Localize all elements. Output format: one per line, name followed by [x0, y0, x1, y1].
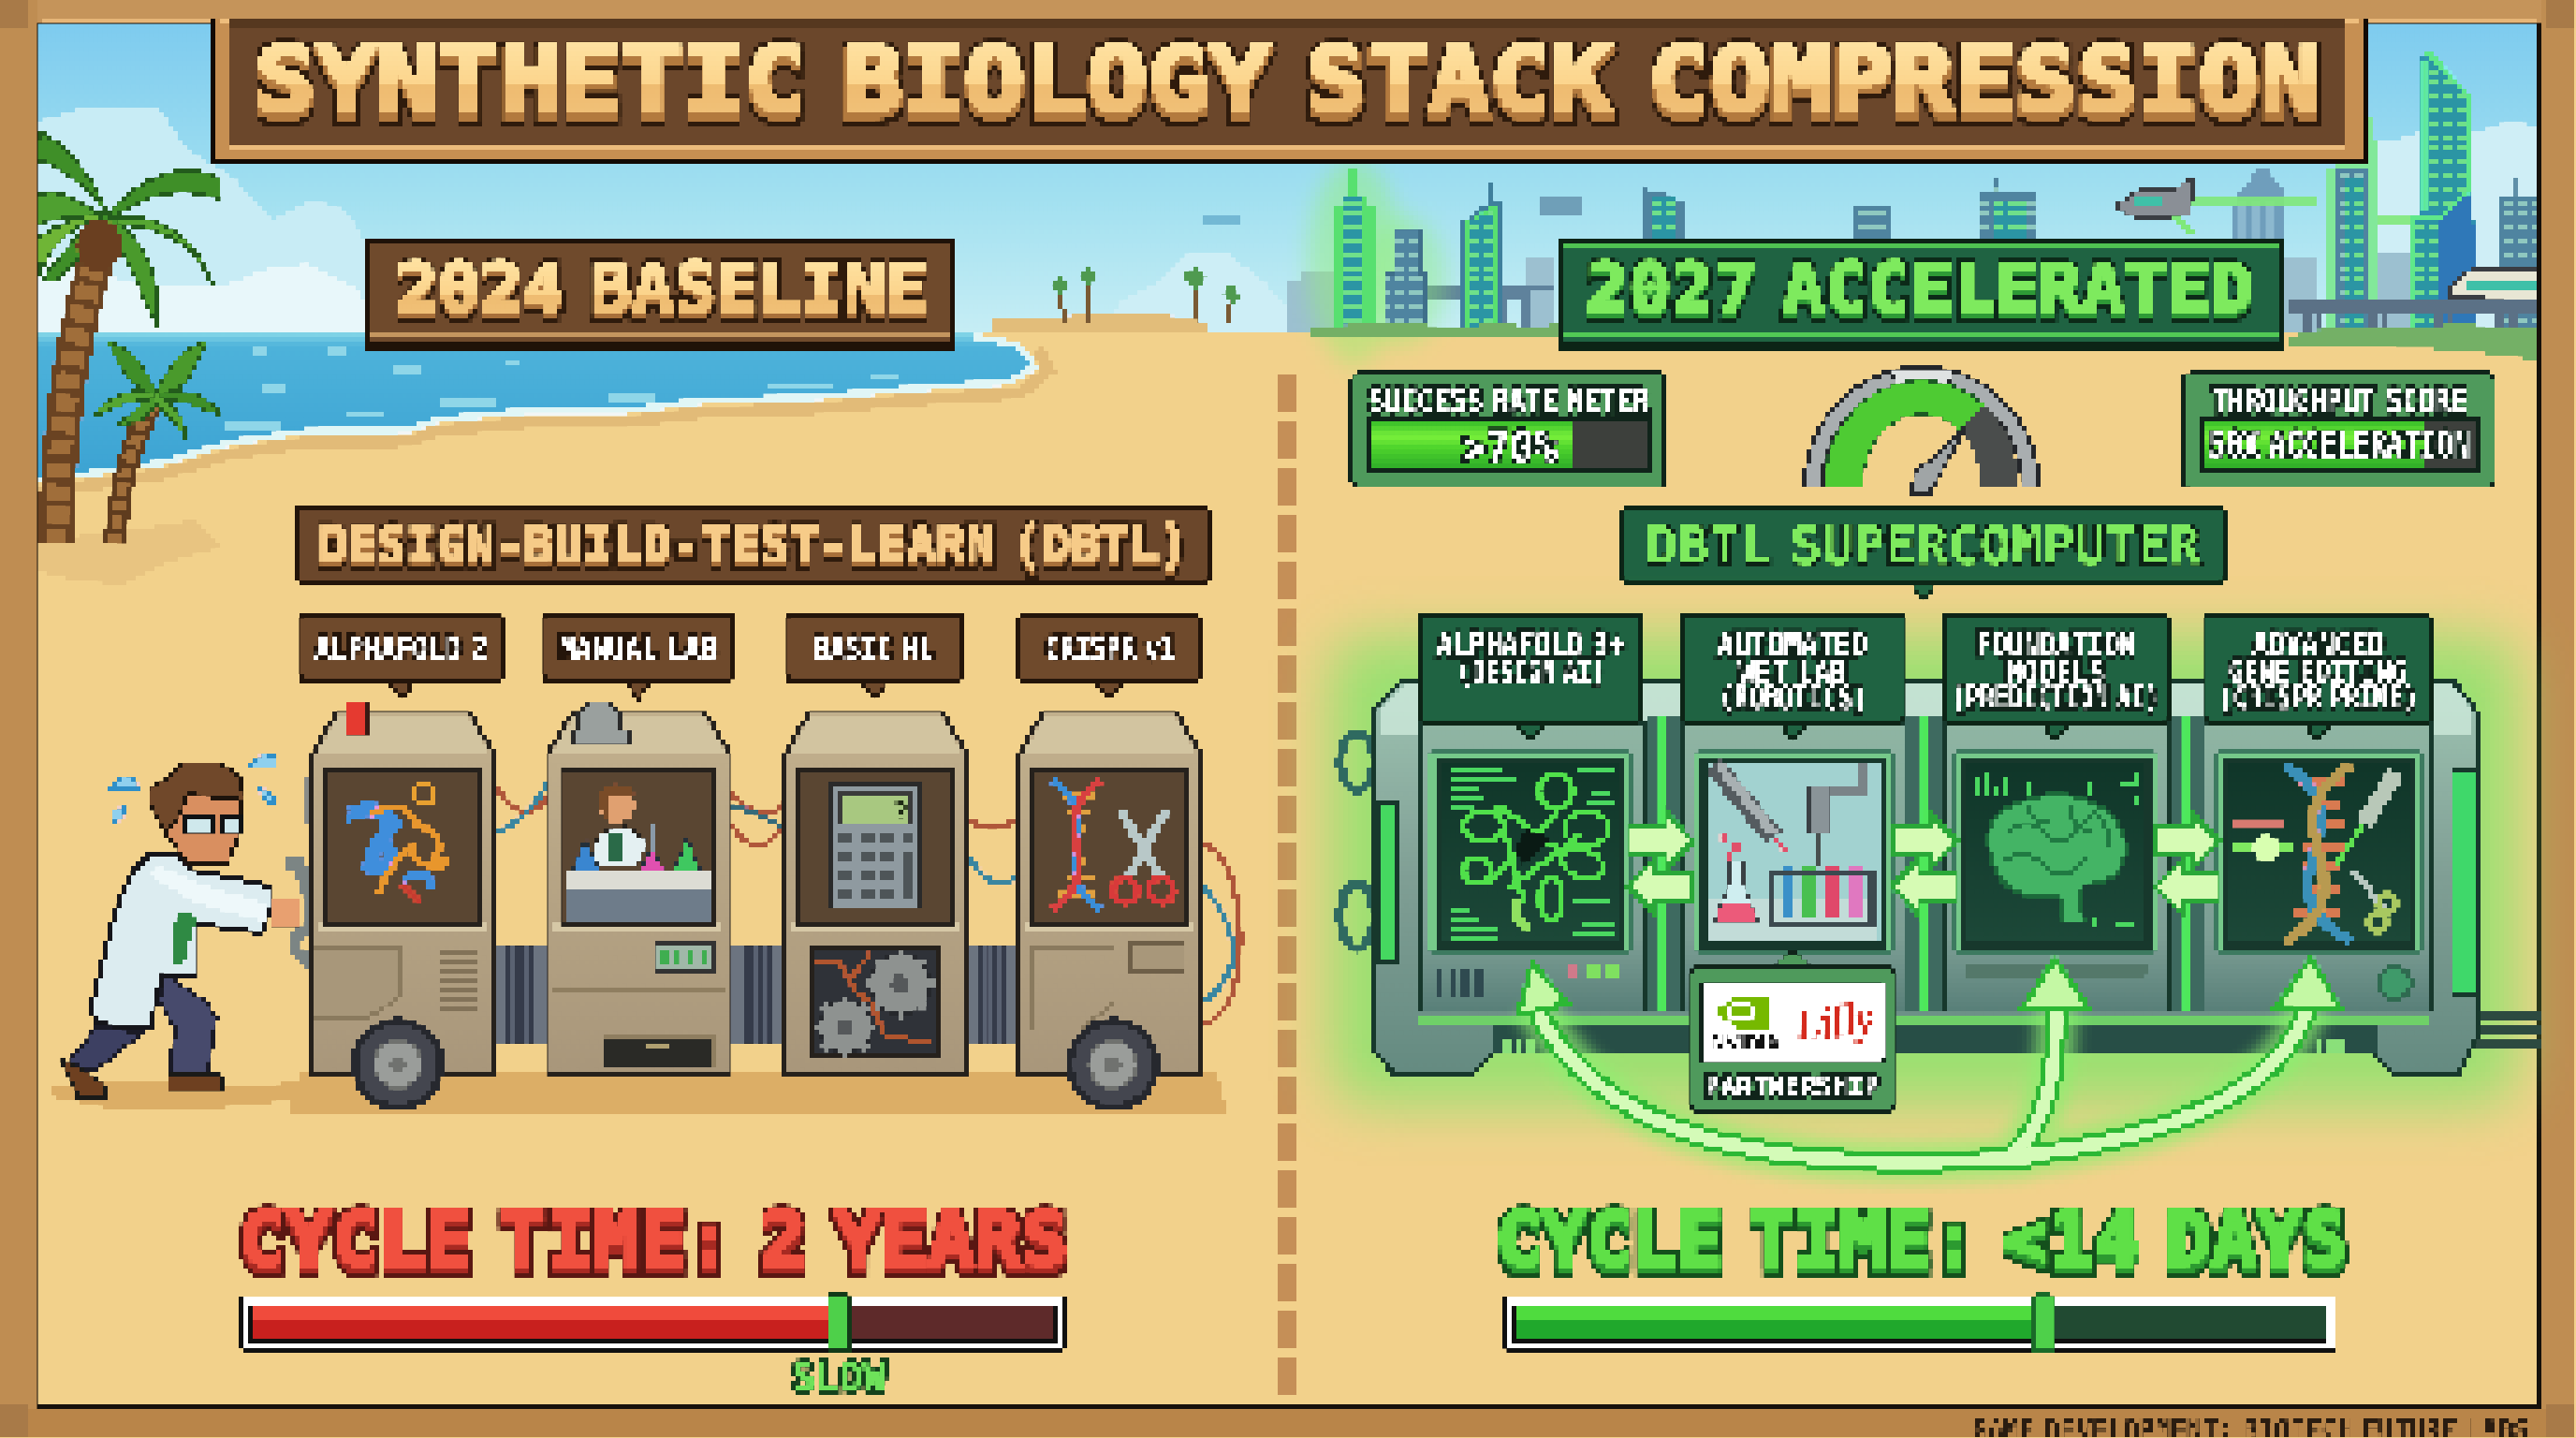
screen: gene editing DNA: [2216, 751, 2422, 953]
panel: success rate meter: SUCCESS RATE METER: [1368, 383, 1650, 420]
tag: automated wet lab: [1682, 615, 1905, 741]
side handles: [1340, 733, 1374, 948]
chassis: [1373, 680, 2477, 1076]
futuristic city skyline: [1288, 50, 2539, 365]
panel: throughput score: [2183, 374, 2495, 487]
beacon: [346, 702, 367, 736]
bushes along left city base: [1310, 323, 1558, 339]
protein icon: [350, 784, 448, 903]
module 4: CRISPR v1: [1018, 712, 1201, 1111]
partnership card: NVIDIA.: [1711, 1032, 1786, 1055]
big palm tree: [37, 131, 221, 545]
screen: automated wet lab: [1694, 751, 1893, 953]
title banner: SYNTHETIC BIOLOGY STACK COMPRESSION: [255, 27, 2321, 132]
calculator: [829, 785, 920, 908]
DBTL header left: DESIGN-BUILD-TEST-LEARN (DBTL): [318, 515, 1189, 574]
screen with small scientist: [562, 769, 715, 923]
dark gaps with green power lines: [1646, 718, 2204, 1011]
scissors icon: [1113, 811, 1174, 902]
partnership card: Lilly: [1791, 991, 1878, 1051]
speedometer gauge: [1805, 367, 2039, 492]
tag: AlphaFold 2: ALPHAFOLD 2: [315, 630, 488, 667]
progress bar: slow: [241, 1295, 1065, 1351]
right tower: [2497, 198, 2539, 334]
tag: manual lab: [543, 615, 734, 698]
hair: [150, 763, 243, 833]
sky: [0, 0, 2576, 334]
title banner: [212, 17, 2366, 166]
front leg: [159, 974, 216, 1075]
palm shadow on sand: [37, 520, 222, 585]
bay details: [1440, 968, 1479, 998]
tag: manual lab: MANUAL LAB: [559, 630, 717, 667]
tower 3: [1459, 184, 1500, 335]
scientist pushing the machine: [59, 754, 312, 1098]
tag: foundation models: [1944, 615, 2168, 741]
tower 2: [1385, 230, 1425, 335]
2024 baseline banner: [365, 237, 957, 353]
tag: automated wet lab: WET LAB: [1738, 653, 1847, 691]
flying ship with green beam: [2115, 181, 2411, 234]
tag: foundation models: FOUNDATION: [1976, 626, 2135, 664]
tag: CRISPR v1: [1018, 615, 1200, 698]
clouds: [37, 108, 2539, 334]
panel: success rate meter: >70%: [1462, 422, 1558, 473]
distant dune and palms: [993, 267, 1240, 334]
tag: basic ML: BASIC ML: [813, 630, 934, 667]
ground shadow under machine: [53, 1070, 1227, 1115]
tag: automated wet lab: AUTOMATED: [1718, 626, 1867, 664]
slow label: SLOW: [792, 1355, 886, 1401]
tag: advanced gene editing: (CRISPR PRIME): [2218, 680, 2418, 717]
panel: throughput score: THROUGHPUT SCORE: [2212, 383, 2467, 420]
DBTL supercomputer machine: [1340, 680, 2540, 1076]
tag: AlphaFold 3+: (DESIGN AI): [1457, 653, 1605, 691]
module 1: AlphaFold 2: [304, 702, 494, 1111]
center divider between eras: [1280, 374, 1296, 1408]
sweat drops: [110, 754, 276, 822]
2027 accelerated banner: 2027 ACCELERATED: [1586, 249, 2253, 329]
panel: success rate meter: [1352, 374, 1665, 487]
module 2: manual lab: [548, 702, 730, 1076]
shoes: [59, 1058, 223, 1098]
DBTL supercomputer header: [1623, 506, 2224, 601]
machine glow: [1329, 637, 2518, 1105]
2027 accelerated banner: [1558, 237, 2283, 353]
screen: design AI protein: [1427, 751, 1631, 953]
tag: basic ML: [786, 615, 963, 698]
icon: nvidia eye: [1716, 995, 1769, 1030]
bushes: [2287, 323, 2539, 360]
cables: [2477, 1016, 2540, 1044]
curved feedback arrows: [1518, 958, 2340, 1162]
hand: [271, 899, 300, 928]
glasses: [183, 816, 242, 833]
screen: foundation models brain: [1954, 751, 2158, 953]
screen: [327, 769, 478, 923]
module bays: [1419, 722, 2431, 1011]
lab coat: [91, 855, 271, 1030]
small palm tree: [94, 342, 223, 545]
wires between baseline modules: [494, 784, 1240, 1025]
gears panel: [812, 947, 940, 1057]
central spire tower: [2234, 167, 2286, 334]
sea and shoreline: [37, 334, 1048, 492]
tag: foundation models: MODELS: [2006, 653, 2105, 691]
big tower: [2418, 50, 2478, 334]
loop arrows between modules: [1629, 813, 2218, 915]
glow halos: [1308, 159, 1401, 365]
module 3: basic ML: [784, 712, 967, 1076]
DBTL supercomputer header: DBTL SUPERCOMPUTER: [1646, 516, 2201, 577]
tag: automated wet lab: (ROBOTICS): [1720, 680, 1867, 717]
tag: advanced gene editing: ADVANCED: [2252, 626, 2384, 664]
DNA icon: [1053, 781, 1100, 909]
cycle time under 14 days: CYCLE TIME: <14 DAYS: [1496, 1196, 2348, 1283]
partnership card: PARTNERSHIP: [1705, 1071, 1880, 1104]
back leg: [68, 1027, 143, 1072]
side plate and vents: [314, 946, 400, 1017]
elevated walkway: [1426, 284, 1554, 334]
tag: advanced gene editing: GENE EDITING: [2229, 653, 2407, 691]
bellows connectors: [493, 946, 1019, 1043]
hazy background towers: [1288, 253, 2408, 334]
tag: AlphaFold 3+: ALPHAFOLD 3+: [1437, 626, 1625, 664]
2024 baseline banner: 2024 BASELINE: [396, 249, 928, 329]
head and face: [162, 793, 241, 864]
handle: [285, 864, 312, 964]
tower 1: [1332, 169, 1378, 335]
indicator lights: [656, 944, 713, 971]
panel: throughput score: 50X ACCELERATION: [2209, 425, 2470, 465]
tag: foundation models: (PREDICTION AI): [1952, 680, 2159, 717]
monorail train: [2451, 270, 2539, 300]
tag: advanced gene editing: [2204, 615, 2431, 741]
cycle time 2 years: CYCLE TIME: 2 YEARS: [239, 1196, 1068, 1283]
module 3: basic ML: ?: [893, 796, 909, 827]
progress bar: fast: [1502, 1295, 2337, 1351]
tag: AlphaFold 3+: [1419, 615, 1641, 741]
partnership card: [1690, 949, 1895, 1110]
highway bridge: [2287, 300, 2539, 315]
tag: AlphaFold 2: [300, 615, 504, 698]
tag: CRISPR v1: CRISPR v1: [1045, 630, 1176, 667]
tower 8: [2324, 115, 2378, 334]
